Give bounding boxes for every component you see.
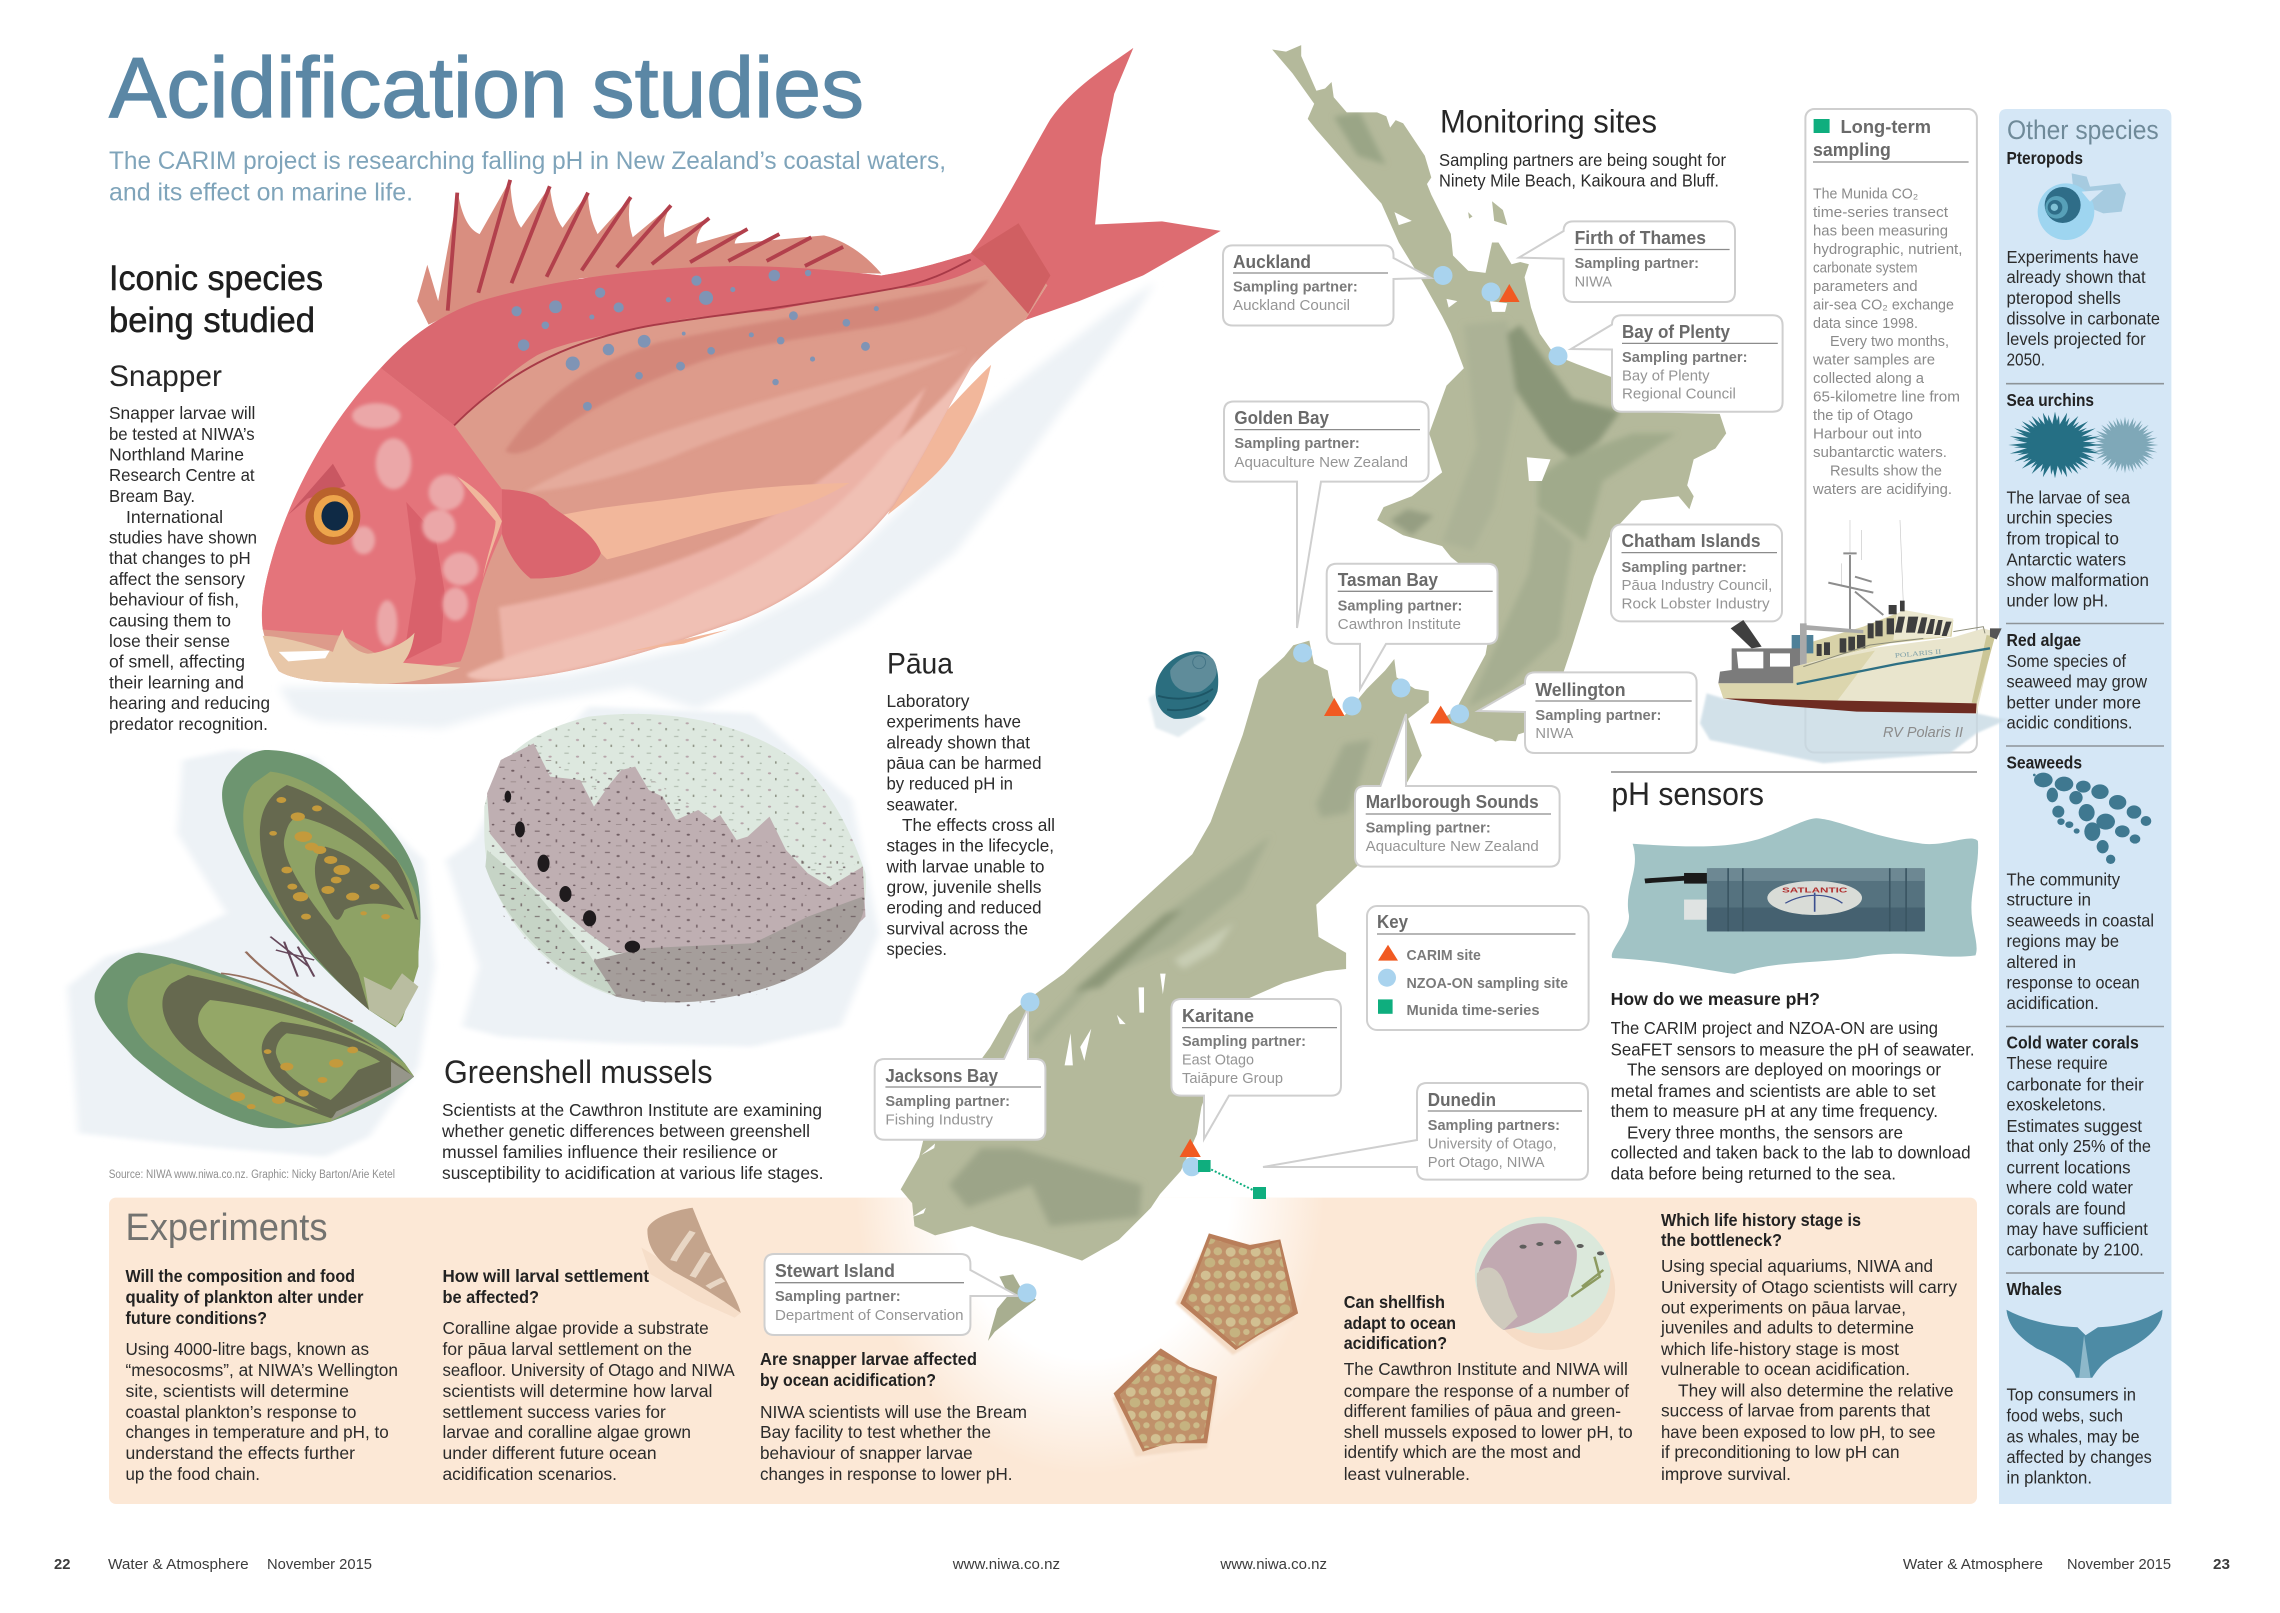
- text block: snapper: affect the sensory: [109, 569, 245, 589]
- text block: paua: grow, juvenile shells: [886, 877, 1042, 897]
- text block: paua: already shown that: [886, 732, 1030, 752]
- species: cold water corals: carbonate by 2100.: [2006, 1240, 2144, 1260]
- experiment: larval settlement: be affected?: [442, 1287, 539, 1307]
- species: pteropods: pteropod shells: [2006, 288, 2121, 308]
- footer: November 2015: [267, 1556, 372, 1573]
- text block: paua: [886, 648, 1055, 959]
- experiment: shellfish adaptation: shell mussels exposed to lower pH, to: [1344, 1422, 1633, 1442]
- callout: Stewart Island: [764, 1254, 1018, 1335]
- callout: Tasman Bay: Tasman Bay: [1338, 569, 1439, 590]
- icon: small paua shell: [1149, 651, 1218, 737]
- experiment: plankton: future conditions?: [126, 1308, 267, 1328]
- species: red algae: better under more: [2006, 692, 2141, 712]
- species: cold water corals: These require: [2006, 1053, 2108, 1073]
- panel: long-term sampling: water samples are: [1812, 353, 1935, 369]
- footer: 23: [2213, 1556, 2230, 1573]
- icon: whale tail: [2006, 1310, 2162, 1378]
- icon: sea urchins: [2008, 410, 2158, 480]
- subtitle: and its effect on marine life.: [109, 178, 413, 206]
- species: sea urchins: show malformation: [2006, 570, 2149, 590]
- callout: Bay of Plenty: Regional Council: [1622, 386, 1736, 402]
- species: cold water corals: Estimates suggest: [2006, 1116, 2142, 1136]
- callout: Dunedin: University of Otago,: [1428, 1136, 1557, 1152]
- callout: Golden Bay: Golden Bay: [1234, 407, 1330, 428]
- text block: snapper: be tested at NIWA’s: [109, 424, 255, 444]
- monitoring sites text: Sampling partners are being sought for: [1439, 150, 1726, 170]
- experiment: life history: out experiments on pāua larvae,: [1661, 1298, 1906, 1318]
- species: whales: in plankton.: [2006, 1468, 2092, 1488]
- species: whales: as whales, may be: [2006, 1426, 2140, 1446]
- panel: long-term sampling: Long-term: [1840, 116, 1931, 137]
- text block: snapper: Bream Bay.: [109, 486, 195, 506]
- callout: Dunedin: Dunedin: [1428, 1089, 1496, 1110]
- experiment: life history: University of Otago scientists will carry: [1661, 1277, 1957, 1297]
- experiment: life history: [1660, 1210, 1957, 1484]
- species: cold water corals: carbonate for their: [2006, 1074, 2144, 1094]
- callout: Chatham Islands: Chatham Islands: [1622, 530, 1761, 551]
- species: seaweeds: seaweeds in coastal: [2006, 910, 2154, 930]
- callout: Chatham Islands: Pāua Industry Council,: [1622, 578, 1772, 594]
- species: pteropods: Experiments have: [2006, 247, 2139, 267]
- species: red algae: Red algae: [2006, 630, 2081, 650]
- callout: Marlborough Sounds: Marlborough Sounds: [1366, 791, 1539, 812]
- map key: [1367, 906, 1589, 1030]
- callout: Auckland: [1223, 245, 1431, 326]
- text block: greenshell mussels: Greenshell mussels: [444, 1054, 712, 1090]
- species: seaweeds: structure in: [2006, 890, 2091, 910]
- callout: Bay of Plenty: Sampling partner:: [1622, 350, 1748, 366]
- experiment: shellfish adaptation: The Cawthron Institute and NIWA will: [1344, 1359, 1628, 1379]
- callout: Stewart Island: Department of Conservation: [775, 1308, 964, 1324]
- callout: Wellington: Wellington: [1535, 679, 1626, 700]
- panel: long-term sampling: parameters and: [1813, 279, 1918, 295]
- species: sea urchins: [2006, 390, 2164, 624]
- experiment: life history: Using special aquariums, NIWA and: [1661, 1256, 1933, 1276]
- text block: snapper: [109, 360, 270, 734]
- footer: [54, 1556, 2230, 1573]
- callout: Dunedin: [1263, 1083, 1588, 1180]
- callout: Wellington: Sampling partner:: [1535, 708, 1661, 724]
- text block: snapper: Research Centre at: [109, 465, 255, 485]
- panel: long-term sampling: has been measuring: [1813, 223, 1948, 239]
- species: pteropods: 2050.: [2006, 350, 2045, 370]
- experiment: life history: which life-history stage is most: [1660, 1339, 1899, 1359]
- species: whales: affected by changes: [2006, 1447, 2152, 1467]
- species: pteropods: [2006, 148, 2164, 384]
- experiment: shellfish adaptation: Can shellfish: [1344, 1292, 1445, 1312]
- panel: long-term sampling: air-sea CO₂ exchange: [1813, 297, 1954, 313]
- text block: paua: survival across the: [886, 918, 1028, 938]
- text block: paua: experiments have: [886, 712, 1021, 732]
- panel: long-term sampling: 65-kilometre line from: [1813, 390, 1960, 406]
- species: seaweeds: response to ocean: [2006, 972, 2140, 992]
- text block: snapper: of smell, affecting: [109, 652, 245, 672]
- text block: how do we measure pH: collected and taken back to the lab to download: [1611, 1142, 1971, 1162]
- panel: other species background: [1999, 109, 2171, 1504]
- text block: how do we measure pH: metal frames and scientists are able to set: [1611, 1081, 1936, 1101]
- callout: Stewart Island: Stewart Island: [775, 1260, 895, 1281]
- experiment: larval settlement: for pāua larval settlement on the: [442, 1339, 692, 1359]
- callout: Tasman Bay: Cawthron Institute: [1338, 617, 1461, 633]
- footer: Water & Atmosphere: [1903, 1556, 2043, 1573]
- map: South Island and Stewart Island: [901, 641, 1546, 1341]
- text block: greenshell mussels: [441, 1054, 824, 1183]
- callout: Auckland: Auckland: [1233, 251, 1311, 272]
- map key: CARIM site: [1406, 948, 1481, 964]
- experiment: life history: have been exposed to low pH, to see: [1661, 1422, 1936, 1442]
- species: sea urchins: urchin species: [2006, 508, 2113, 528]
- heading: other species: Other species: [2007, 115, 2159, 145]
- text block: how do we measure pH: SeaFET sensors to measure the pH of seawater.: [1611, 1040, 1975, 1060]
- experiment: life history: Which life history stage is: [1661, 1210, 1861, 1230]
- experiment: larval settlement: under different future ocean: [442, 1443, 657, 1463]
- panel: long-term sampling: sampling: [1813, 139, 1891, 160]
- footer: November 2015: [2067, 1556, 2171, 1573]
- callout: Karitane: East Otago: [1182, 1052, 1254, 1068]
- experiment: life history: the bottleneck?: [1661, 1230, 1782, 1250]
- text block: paua: seawater.: [886, 794, 958, 814]
- illustration: SeaFET sensor: SATLANTIC: [1782, 886, 1847, 895]
- species: sea urchins: Antarctic waters: [2006, 550, 2126, 570]
- map key: Key: [1377, 911, 1409, 932]
- text block: snapper: that changes to pH: [109, 548, 251, 568]
- icon: small paua shell: [1475, 1217, 1615, 1350]
- panel: long-term sampling: The Munida CO₂: [1813, 186, 1918, 202]
- icon: pteropod: [2038, 173, 2126, 240]
- text block: how do we measure pH: them to measure pH at any time frequency.: [1611, 1101, 1938, 1121]
- callout: Dunedin: Port Otago, NIWA: [1428, 1155, 1545, 1171]
- panel: long-term sampling: carbonate system: [1813, 260, 1918, 276]
- illustration: large paua shell and mussels: [67, 707, 879, 1157]
- callout: Jacksons Bay: Fishing Industry: [885, 1112, 994, 1128]
- experiment: plankton: coastal plankton’s response to: [126, 1402, 356, 1422]
- text block: snapper: International: [126, 507, 223, 527]
- text block: snapper: Snapper larvae will: [109, 403, 255, 423]
- species: seaweeds: regions may be: [2006, 931, 2119, 951]
- experiment: plankton: up the food chain.: [126, 1464, 260, 1484]
- experiment: shellfish adaptation: compare the response of a number of: [1344, 1381, 1629, 1401]
- panel: long-term sampling: Harbour out into: [1813, 427, 1922, 443]
- illustration: RV Polaris II boat: POLARIS II: [1895, 649, 1942, 660]
- experiment: life history: success of larvae from parents that: [1661, 1400, 1930, 1420]
- subtitle: [109, 147, 946, 206]
- text block: paua: stages in the lifecycle,: [886, 836, 1054, 856]
- footer: www.niwa.co.nz: [952, 1556, 1060, 1573]
- experiment: larval settlement: seafloor. University of Otago and NIWA: [442, 1360, 735, 1380]
- panel: long-term sampling: hydrographic, nutrient,: [1813, 242, 1962, 258]
- callout: Karitane: Sampling partner:: [1182, 1034, 1306, 1050]
- species: cold water corals: where cold water: [2006, 1178, 2133, 1198]
- panel: long-term sampling: waters are acidifying.: [1812, 482, 1952, 498]
- experiment: shellfish adaptation: acidification?: [1344, 1333, 1447, 1353]
- panel: long-term sampling: Every two months,: [1830, 334, 1949, 350]
- illustration: RV Polaris II boat: [1700, 520, 2007, 763]
- text block: how do we measure pH: data before being returned to the sea.: [1611, 1164, 1896, 1184]
- text block: paua: pāua can be harmed: [886, 753, 1042, 773]
- panel: long-term sampling: time-series transect: [1813, 205, 1948, 221]
- experiment: snapper larvae: Bay facility to test whether the: [760, 1422, 991, 1442]
- panel: experiments background: [109, 1198, 1977, 1504]
- text block: paua: The effects cross all: [902, 815, 1055, 835]
- species: seaweeds: acidification.: [2006, 993, 2099, 1013]
- callout: Tasman Bay: [1327, 564, 1498, 689]
- panel: long-term sampling: data since 1998.: [1813, 316, 1918, 332]
- callout: Firth of Thames: NIWA: [1575, 274, 1612, 290]
- text block: snapper: behaviour of fish,: [109, 590, 239, 610]
- experiment: larval settlement: How will larval settlement: [442, 1266, 649, 1286]
- callout: Jacksons Bay: [875, 1008, 1045, 1140]
- species: red algae: Some species of: [2006, 651, 2126, 671]
- experiment: life history: vulnerable to ocean acidification.: [1661, 1359, 1910, 1379]
- experiment: plankton: changes in temperature and pH, to: [126, 1422, 389, 1442]
- species: red algae: seaweed may grow: [2006, 672, 2147, 692]
- text block: snapper: their learning and: [109, 672, 244, 692]
- experiment: snapper larvae: NIWA scientists will use the Bream: [760, 1402, 1027, 1422]
- callout: Golden Bay: Aquaculture New Zealand: [1234, 455, 1408, 471]
- map key: Munida time-series: [1406, 1003, 1540, 1019]
- callout: Golden Bay: Sampling partner:: [1234, 436, 1360, 452]
- experiment: plankton: “mesocosms”, at NIWA’s Wellington: [126, 1360, 398, 1380]
- text block: how do we measure pH: How do we measure pH?: [1611, 989, 1820, 1009]
- panel: long-term sampling: subantarctic waters.: [1813, 445, 1947, 461]
- callout: Karitane: Karitane: [1182, 1005, 1254, 1026]
- text block: snapper: lose their sense: [109, 631, 230, 651]
- title: Acidification studies: [109, 41, 864, 136]
- species: whales: Top consumers in: [2006, 1384, 2136, 1404]
- callout: Karitane: [1171, 999, 1341, 1139]
- experiment: shellfish adaptation: different families of pāua and green-: [1344, 1401, 1621, 1421]
- subtitle: The CARIM project is researching falling pH in New Zealand’s coastal waters,: [109, 147, 946, 175]
- callout: Bay of Plenty: Bay of Plenty: [1622, 368, 1710, 384]
- species: cold water corals: exoskeletons.: [2006, 1094, 2106, 1114]
- species: cold water corals: [2006, 1032, 2164, 1273]
- species: cold water corals: Cold water corals: [2006, 1032, 2139, 1052]
- species: cold water corals: may have sufficient: [2006, 1219, 2148, 1239]
- footer: www.niwa.co.nz: [1219, 1556, 1327, 1573]
- monitoring sites text: Ninety Mile Beach, Kaikoura and Bluff.: [1439, 170, 1719, 190]
- text block: greenshell mussels: Scientists at the Cawthron Institute are examining: [442, 1100, 822, 1120]
- experiment: plankton: Using 4000-litre bags, known as: [126, 1339, 369, 1359]
- text block: snapper: studies have shown: [109, 528, 257, 548]
- experiment: larval settlement: acidification scenarios.: [442, 1464, 617, 1484]
- caption: RV Polaris II: RV Polaris II: [1883, 724, 1963, 741]
- experiment: shellfish adaptation: adapt to ocean: [1344, 1313, 1456, 1333]
- panel: long-term sampling: the tip of Otago: [1813, 408, 1913, 424]
- experiment: larval settlement: Coralline algae provide a substrate: [442, 1318, 709, 1338]
- experiment: snapper larvae: changes in response to lower pH.: [760, 1464, 1012, 1484]
- callout: Tasman Bay: Sampling partner:: [1338, 598, 1462, 614]
- section: pH sensors: pH sensors: [1611, 776, 1764, 812]
- species: seaweeds: altered in: [2006, 952, 2076, 972]
- text block: paua: eroding and reduced: [886, 898, 1042, 918]
- species: pteropods: already shown that: [2006, 267, 2146, 287]
- panel: long-term sampling: [1805, 109, 1977, 752]
- experiment: life history: improve survival.: [1661, 1464, 1791, 1484]
- panel: long-term sampling: collected along a: [1813, 371, 1925, 387]
- text block: paua: with larvae unable to: [886, 856, 1044, 876]
- mussel lower: [95, 953, 414, 1128]
- callout: Jacksons Bay: Sampling partner:: [885, 1094, 1010, 1110]
- text block: greenshell mussels: whether genetic differences between greenshell: [441, 1121, 810, 1141]
- text block: paua: by reduced pH in: [886, 774, 1013, 794]
- source credit: Source: NIWA www.niwa.co.nz. Graphic: Nicky Barton/Arie Ketel: [109, 1169, 395, 1181]
- experiment: plankton: understand the effects further: [126, 1443, 355, 1463]
- callout: Firth of Thames: Sampling partner:: [1575, 256, 1699, 272]
- callout: Karitane: Taiāpure Group: [1182, 1071, 1283, 1087]
- icons: starfish pair: [1112, 1233, 1298, 1457]
- species: pteropods: levels projected for: [2006, 329, 2146, 349]
- monitoring sites text: [1439, 104, 1726, 190]
- species: sea urchins: The larvae of sea: [2006, 488, 2130, 508]
- experiment: life history: if preconditioning to low pH can: [1661, 1442, 1900, 1462]
- callout: Stewart Island: Sampling partner:: [775, 1289, 901, 1305]
- callout: Firth of Thames: Firth of Thames: [1575, 227, 1706, 248]
- mussel upper: [222, 750, 421, 1027]
- species: whales: [2006, 1279, 2152, 1488]
- species: whales: Whales: [2006, 1279, 2062, 1299]
- experiment: snapper larvae: Are snapper larvae affected: [760, 1349, 977, 1369]
- footer: 22: [54, 1556, 70, 1573]
- heading: experiments: Experiments: [126, 1207, 328, 1249]
- experiment: larval settlement: scientists will determine how larval: [442, 1381, 712, 1401]
- footer: Water & Atmosphere: [108, 1556, 249, 1573]
- experiment: larval settlement: [442, 1266, 735, 1484]
- monitoring sites text: Monitoring sites: [1440, 104, 1657, 140]
- text block: snapper: Northland Marine: [109, 444, 244, 464]
- species: seaweeds: The community: [2006, 870, 2120, 890]
- callout: Firth of Thames: [1519, 221, 1735, 302]
- experiment: plankton: [126, 1266, 398, 1484]
- illustration: snapper fish: [262, 48, 1221, 728]
- text block: snapper: causing them to: [109, 610, 231, 630]
- experiment: shellfish adaptation: [1344, 1292, 1633, 1484]
- text block: paua: Pāua: [887, 648, 953, 680]
- species: pteropods: dissolve in carbonate: [2006, 308, 2160, 328]
- species: sea urchins: Sea urchins: [2006, 390, 2094, 410]
- callout: Wellington: [1478, 672, 1697, 753]
- callout: Chatham Islands: Rock Lobster Industry: [1622, 596, 1770, 612]
- species: whales: food webs, such: [2006, 1406, 2123, 1426]
- callout: Marlborough Sounds: [1355, 714, 1560, 867]
- text block: how do we measure pH: [1611, 989, 1975, 1184]
- text block: how do we measure pH: The sensors are deployed on moorings or: [1627, 1060, 1941, 1080]
- callout: Jacksons Bay: Jacksons Bay: [885, 1065, 999, 1086]
- species: red algae: acidic conditions.: [2006, 712, 2132, 732]
- callout: Wellington: NIWA: [1535, 726, 1574, 742]
- callout: Chatham Islands: Sampling partner:: [1622, 560, 1747, 576]
- experiment: larval settlement: larvae and coralline algae grown: [442, 1422, 691, 1442]
- species: cold water corals: corals are found: [2006, 1198, 2126, 1218]
- ventral fin: [888, 365, 991, 515]
- experiment: plankton: quality of plankton alter under: [126, 1287, 364, 1307]
- panel: long-term sampling: Results show the: [1830, 464, 1942, 480]
- species: sea urchins: under low pH.: [2006, 590, 2108, 610]
- callout: Marlborough Sounds: Aquaculture New Zealand: [1366, 839, 1539, 855]
- callout: Auckland: Sampling partner:: [1233, 280, 1358, 296]
- experiment: plankton: site, scientists will determine: [126, 1381, 349, 1401]
- callout: Marlborough Sounds: Sampling partner:: [1366, 820, 1491, 836]
- icon: seaweed: [2033, 773, 2151, 864]
- text block: snapper: predator recognition.: [109, 714, 268, 734]
- experiment: shellfish adaptation: least vulnerable.: [1344, 1464, 1470, 1484]
- text block: how do we measure pH: The CARIM project and NZOA-ON are using: [1611, 1018, 1938, 1038]
- text block: snapper: hearing and reducing: [109, 693, 270, 713]
- species: seaweeds: Seaweeds: [2006, 752, 2082, 772]
- experiment: life history: They will also determine the relative: [1678, 1380, 1954, 1400]
- text block: paua: Laboratory: [886, 691, 970, 711]
- map key: NZOA-ON sampling site: [1406, 976, 1568, 992]
- experiment: snapper larvae: by ocean acidification?: [760, 1370, 936, 1390]
- text block: greenshell mussels: susceptibility to acidification at various life stages.: [442, 1163, 824, 1183]
- sidebar: other species text: [2006, 115, 2164, 1488]
- callout: Chatham Islands: [1611, 524, 1782, 621]
- callout: Bay of Plenty: [1571, 315, 1783, 412]
- species: red algae: [2006, 630, 2164, 746]
- text block: greenshell mussels: mussel families influence their resilience or: [442, 1142, 778, 1162]
- species: cold water corals: current locations: [2006, 1157, 2131, 1177]
- heading: iconic species: Iconic species: [109, 259, 323, 298]
- experiment: snapper larvae: [760, 1349, 1027, 1484]
- experiment: snapper larvae: behaviour of snapper larvae: [760, 1443, 973, 1463]
- experiment: larval settlement: settlement success varies for: [442, 1402, 666, 1422]
- map site markers: [1018, 266, 1568, 1302]
- map: North Island: [1272, 45, 1726, 741]
- illustration: SeaFET sensor: [1612, 818, 1978, 974]
- species: cold water corals: that only 25% of the: [2006, 1136, 2151, 1156]
- heading: iconic species: [109, 259, 323, 340]
- callout: Golden Bay: [1224, 402, 1429, 628]
- callout: Dunedin: Sampling partners:: [1428, 1118, 1560, 1134]
- species: seaweeds: [2006, 752, 2164, 1026]
- callout: Auckland: Auckland Council: [1233, 298, 1350, 314]
- text block: how do we measure pH: Every three months, the sensors are: [1627, 1122, 1903, 1142]
- text block: paua: species.: [886, 939, 947, 959]
- experiment: plankton: Will the composition and food: [126, 1266, 355, 1286]
- experiment: shellfish adaptation: identify which are the most and: [1344, 1442, 1581, 1462]
- species: pteropods: Pteropods: [2006, 148, 2083, 168]
- text block: snapper: Snapper: [109, 360, 222, 393]
- species: sea urchins: from tropical to: [2006, 528, 2119, 548]
- panel text: experiments: [126, 1207, 1957, 1484]
- callout: Bay of Plenty: Bay of Plenty: [1622, 321, 1731, 342]
- experiment: life history: juveniles and adults to determine: [1660, 1318, 1914, 1338]
- icon: turret shell: [641, 1208, 741, 1318]
- heading: iconic species: being studied: [109, 301, 315, 340]
